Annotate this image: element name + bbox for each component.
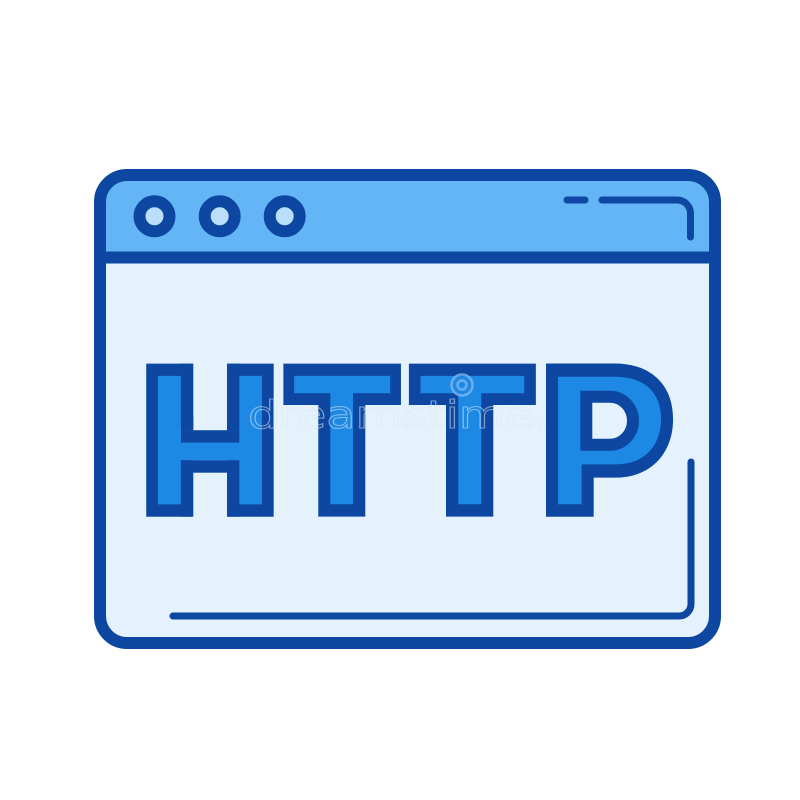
letter T: T	[284, 333, 399, 548]
panel: title bar	[100, 175, 715, 258]
icon: browser window with HTTP	[94, 169, 721, 649]
watermark: dreamstime.	[248, 393, 550, 437]
letter T: T	[291, 334, 394, 548]
letter T: T	[417, 333, 528, 547]
letter T: T	[412, 333, 527, 548]
heading: HTTP	[146, 364, 674, 517]
title bar highlight lines	[567, 200, 690, 237]
panel: window body	[100, 175, 715, 643]
letter H: H	[144, 332, 276, 547]
window frame	[100, 175, 715, 643]
letter T: T	[284, 333, 399, 548]
letter T: T	[412, 333, 527, 548]
letter T	[408, 364, 536, 517]
letter T: T	[291, 334, 394, 548]
letter T: T	[417, 333, 528, 547]
watermark	[248, 374, 550, 437]
letter P: P	[544, 330, 669, 560]
letter P	[546, 364, 674, 517]
letter P: P	[544, 330, 669, 560]
letter H: H	[144, 332, 276, 547]
body highlight line	[173, 462, 691, 616]
window control buttons	[140, 201, 300, 231]
